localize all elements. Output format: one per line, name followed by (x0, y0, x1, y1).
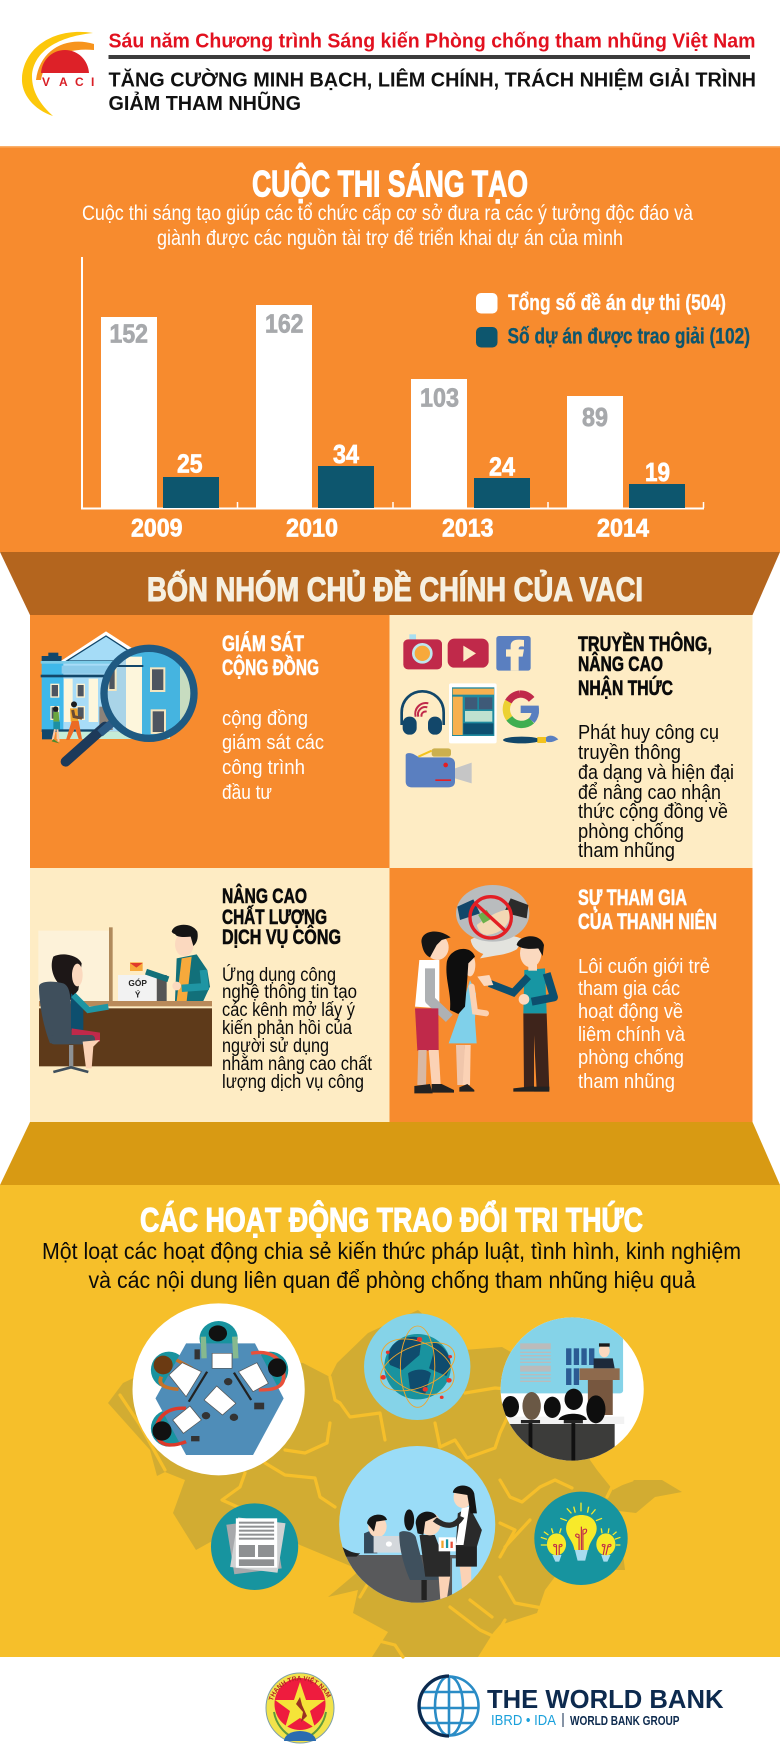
circle: speaker and audience (498, 1317, 644, 1462)
text: knowledge exchange (42, 1238, 741, 1293)
bar chart: 2010 (286, 515, 338, 543)
circle: globe (364, 1313, 470, 1420)
logo: VACI (22, 32, 94, 116)
text: media awareness (578, 722, 734, 862)
circle: documents (211, 1503, 298, 1590)
bar chart: 103 (420, 383, 459, 413)
heading: media awareness: NÂNG CAO (578, 652, 663, 676)
text: community monitoring: cộng đồng (222, 708, 308, 730)
banner: gold transition (0, 1122, 780, 1185)
bar chart: 152 (110, 319, 148, 349)
heading: public service quality: NÂNG CAO (222, 884, 307, 908)
text: media awareness: để nâng cao nhận (578, 782, 721, 804)
logo: The World Bank: WORLD BANK GROUP (570, 1713, 680, 1728)
logo: The World Bank (419, 1676, 724, 1736)
illustration: youth discussing anti-corruption (414, 885, 554, 1093)
text: community monitoring (222, 708, 324, 804)
circle: meeting table (133, 1303, 305, 1475)
header subtitle: TĂNG CƯỜNG MINH BẠCH, LIÊM CHÍNH, TRÁCH NHIỆM GIẢI TRÌNH (108, 68, 756, 92)
chart legend (476, 290, 750, 348)
text: knowledge exchange: và các nội dung liên quan để phòng chống tham nhũng hiệu quả (88, 1267, 696, 1293)
logo: The World Bank: IBRD • IDA (491, 1712, 556, 1729)
woman in chair (39, 954, 108, 1072)
man (146, 925, 210, 1001)
header (22, 30, 756, 116)
heading: media awareness: NHẬN THỨC (578, 676, 673, 700)
heading: public service quality: DỊCH VỤ CÔNG (222, 925, 341, 949)
logo: Government Inspectorate of Vietnam (266, 1672, 334, 1744)
bar chart: 2013 (442, 515, 494, 543)
heading: community monitoring: GIÁM SÁT (222, 631, 304, 656)
logo: Government Inspectorate of Vietnam: THANH TRA VIỆT NAM (268, 1676, 331, 1700)
icons: media and social (402, 634, 558, 787)
young man right (477, 936, 554, 1092)
suggestion box (118, 962, 167, 1001)
text: youth participation: Lôi cuốn giới trẻ (578, 956, 710, 978)
panel: community monitoring (30, 615, 390, 868)
text: public service quality: người sử dụng (222, 1036, 329, 1057)
suggestion box: Ý (135, 989, 141, 1000)
bar chart: 25 (177, 449, 202, 479)
text: youth participation: tham nhũng (578, 1071, 675, 1093)
header subtitle (108, 68, 756, 115)
header subtitle: GIẢM THAM NHŨNG (108, 91, 301, 115)
text: youth participation (578, 956, 710, 1093)
speech bubbles (456, 885, 529, 958)
bar chart: 162 (265, 309, 304, 339)
header title in red: Sáu năm Chương trình Sáng kiến Phòng chống tham nhũng Việt Nam (108, 30, 756, 52)
heading: community monitoring: CỘNG ĐỒNG (222, 655, 319, 680)
suggestion box: GÓP (128, 977, 147, 988)
illustration: feedback desk (38, 925, 212, 1072)
panel: youth participation (390, 868, 752, 1122)
text: media awareness: phòng chống (578, 821, 684, 843)
text: public service quality: nhằm nâng cao chất (222, 1053, 373, 1075)
text: community monitoring: giám sát các (222, 732, 324, 754)
bar chart: 19 (645, 457, 670, 487)
bar chart: 2009 (131, 515, 182, 543)
heading: youth participation: CỦA THANH NIÊN (578, 909, 717, 934)
text: media awareness: thức cộng đồng về (578, 801, 728, 823)
bar chart: 2014 (597, 515, 649, 543)
text: community monitoring: đầu tư (222, 782, 272, 804)
heading: contest: CUỘC THI SÁNG TẠO (252, 163, 528, 205)
bar chart (82, 257, 704, 543)
heading: youth participation: SỰ THAM GIA (578, 885, 687, 910)
circle: light bulbs (534, 1492, 628, 1585)
text: youth participation: phòng chống (578, 1047, 684, 1069)
banner: four themes: BỐN NHÓM CHỦ ĐỀ CHÍNH CỦA VACI (147, 570, 643, 609)
banner: four themes (0, 552, 780, 615)
heading: knowledge exchange: CÁC HOẠT ĐỘNG TRAO ĐỔI TRI THỨC (140, 1201, 643, 1240)
text: public service quality: nghệ thông tin tạo (222, 982, 357, 1003)
circle: office team (339, 1446, 495, 1603)
text: media awareness: truyền thông (578, 742, 681, 764)
heading: youth participation (578, 885, 717, 934)
bar chart: 89 (582, 402, 608, 432)
heading: public service quality (222, 884, 341, 949)
young woman (446, 949, 486, 1092)
panel: public service quality (30, 868, 390, 1122)
contest description: Cuộc thi sáng tạo giúp các tổ chức cấp cơ sở đưa ra các ý tưởng độc đáo và (82, 202, 693, 225)
text: knowledge exchange: Một loạt các hoạt động chia sẻ kiến thức pháp luật, tình hình, kinh nghiệm (42, 1238, 741, 1264)
logo: The World Bank: THE WORLD BANK (487, 1684, 724, 1714)
text: youth participation: tham gia các (578, 978, 680, 1000)
text: media awareness: tham nhũng (578, 840, 675, 862)
text: public service quality: kiến phản hồi của (222, 1018, 352, 1039)
magnifier (66, 643, 200, 762)
map of Vietnam (108, 1310, 682, 1657)
circle illustrations (133, 1303, 644, 1603)
text: public service quality: các kênh mở lấy ý (222, 1000, 355, 1021)
panel: creative contest (0, 146, 780, 552)
text: youth participation: hoạt động về (578, 1001, 683, 1023)
text: public service quality: Ứng dụng công (222, 964, 336, 986)
young man left (414, 931, 454, 1093)
heading: public service quality: CHẤT LƯỢNG (222, 906, 327, 929)
text: media awareness: Phát huy công cụ (578, 722, 719, 744)
icon: building under magnifier (41, 631, 200, 762)
people walking (52, 701, 82, 743)
panel: media awareness (390, 615, 752, 868)
text: media awareness: đa dạng và hiện đại (578, 762, 734, 784)
text: youth participation: liêm chính và (578, 1024, 686, 1046)
text: community monitoring: công trình (222, 757, 305, 779)
heading: media awareness: TRUYỀN THÔNG, (578, 632, 712, 656)
panel: knowledge exchange (0, 1185, 780, 1657)
contest description: giành được các nguồn tài trợ để triển khai dự án của mình (157, 227, 623, 250)
contest description (82, 202, 693, 250)
heading: community monitoring (222, 631, 319, 680)
footer logos (266, 1672, 724, 1744)
heading: media awareness (578, 632, 712, 700)
text: public service quality: lượng dịch vụ công (222, 1072, 364, 1093)
bar chart: 24 (489, 452, 515, 482)
text: public service quality (222, 964, 373, 1093)
bar chart: 34 (333, 439, 359, 469)
logo: VACI: VACI (42, 75, 94, 89)
chart legend: Tổng số đề án dự thi (504) (508, 290, 726, 315)
